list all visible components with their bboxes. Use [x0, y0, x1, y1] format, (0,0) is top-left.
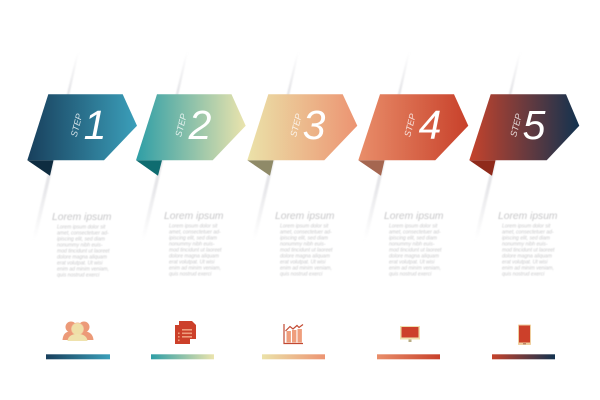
text block 5: enim ad minim veniam,: [502, 266, 554, 272]
step 5 ribbon: 5: [523, 102, 546, 148]
step 2 ribbon: 2: [188, 102, 212, 148]
step 3 ribbon: 3: [303, 102, 326, 148]
text block 4: [384, 211, 444, 278]
step 3 ribbon: [247, 94, 357, 176]
text block 1: Lorem ipsum dolor sit: [57, 224, 106, 230]
text block 3: Lorem ipsum dolor sit: [280, 224, 329, 230]
text block 3: enim ad minim veniam,: [280, 266, 332, 272]
text block 4: amet, consectetuer ad-: [389, 230, 441, 236]
text block 5: nonummy nibh euis-: [502, 242, 548, 248]
text block 1: Lorem ipsum: [52, 212, 112, 223]
text block 2: enim ad minim veniam,: [169, 266, 221, 272]
step 1 ribbon: [27, 94, 137, 176]
text block 2: dolore magna aliquam: [169, 254, 219, 260]
text block 5: [498, 211, 558, 278]
text block 3: amet, consectetuer ad-: [280, 230, 332, 236]
text block 2: erat volutpat. Ut wisi: [169, 260, 215, 266]
text block 1: erat volutpat. Ut wisi: [57, 260, 103, 266]
step 5 ribbon: [469, 94, 579, 176]
bar 4: [377, 354, 440, 359]
text block 5: dolore magna aliquam: [502, 254, 552, 260]
bar 3: [262, 354, 325, 359]
bar 1: [46, 354, 110, 359]
text block 1: [52, 212, 112, 278]
text block 4: erat volutpat. Ut wisi: [389, 260, 435, 266]
text block 4: Lorem ipsum dolor sit: [389, 224, 438, 230]
text block 3: dolore magna aliquam: [280, 254, 330, 260]
text block 3: [275, 211, 335, 278]
text block 5: ipiscing elit, sed diam: [502, 236, 550, 242]
icon: documents: [175, 321, 196, 344]
text block 5: Lorem ipsum dolor sit: [502, 224, 551, 230]
text block 4: dolore magna aliquam: [389, 254, 439, 260]
text block 2: amet, consectetuer ad-: [169, 230, 221, 236]
step 3 ribbon: STEP: [288, 113, 304, 138]
text block 1: ipiscing elit, sed diam: [57, 236, 105, 242]
step 4 ribbon: [358, 94, 468, 176]
text block 3: Lorem ipsum: [275, 211, 335, 222]
step 1 ribbon: 1: [84, 102, 106, 148]
text block 2: [164, 211, 224, 278]
icon: line and bar chart: [284, 324, 303, 344]
text block 5: mod tincidunt ut laoreet: [502, 248, 555, 254]
step 2 ribbon: STEP: [173, 113, 189, 138]
text block 3: mod tincidunt ut laoreet: [280, 248, 333, 254]
text block 1: quis nostrud exerci: [57, 272, 100, 278]
text block 3: ipiscing elit, sed diam: [280, 236, 328, 242]
text block 3: nonummy nibh euis-: [280, 242, 326, 248]
text block 5: Lorem ipsum: [498, 211, 558, 222]
text block 4: enim ad minim veniam,: [389, 266, 441, 272]
text block 2: quis nostrud exerci: [169, 272, 212, 278]
shadow stripes: [32, 52, 521, 240]
step 1 ribbon: STEP: [69, 113, 84, 138]
text block 2: mod tincidunt ut laoreet: [169, 248, 222, 254]
text block 2: ipiscing elit, sed diam: [169, 236, 217, 242]
text block 1: nonummy nibh euis-: [57, 242, 103, 248]
text block 1: dolore magna aliquam: [57, 254, 107, 260]
step 2 ribbon: [136, 94, 246, 176]
text block 4: ipiscing elit, sed diam: [389, 236, 437, 242]
text block 2: Lorem ipsum dolor sit: [169, 224, 218, 230]
step 4 ribbon: STEP: [402, 113, 418, 138]
text block 2: nonummy nibh euis-: [169, 242, 215, 248]
text block 4: nonummy nibh euis-: [389, 242, 435, 248]
text block 3: quis nostrud exerci: [280, 272, 323, 278]
text block 1: mod tincidunt ut laoreet: [57, 248, 110, 254]
bar 5: [492, 354, 555, 359]
step 5 ribbon: STEP: [508, 113, 524, 138]
text block 1: amet, consectetuer ad-: [57, 230, 109, 236]
text block 5: quis nostrud exerci: [502, 272, 545, 278]
text block 5: amet, consectetuer ad-: [502, 230, 554, 236]
icon: people: [62, 322, 94, 341]
text block 5: erat volutpat. Ut wisi: [502, 260, 548, 266]
text block 3: erat volutpat. Ut wisi: [280, 260, 326, 266]
icon: monitor: [400, 326, 420, 342]
text block 4: quis nostrud exerci: [389, 272, 432, 278]
step 4 ribbon: 4: [419, 102, 441, 148]
bar 2: [151, 354, 214, 359]
text block 4: mod tincidunt ut laoreet: [389, 248, 442, 254]
text block 4: Lorem ipsum: [384, 211, 444, 222]
text block 2: Lorem ipsum: [164, 211, 224, 222]
text block 1: enim ad minim veniam,: [57, 266, 109, 272]
icon: tablet: [518, 324, 531, 345]
